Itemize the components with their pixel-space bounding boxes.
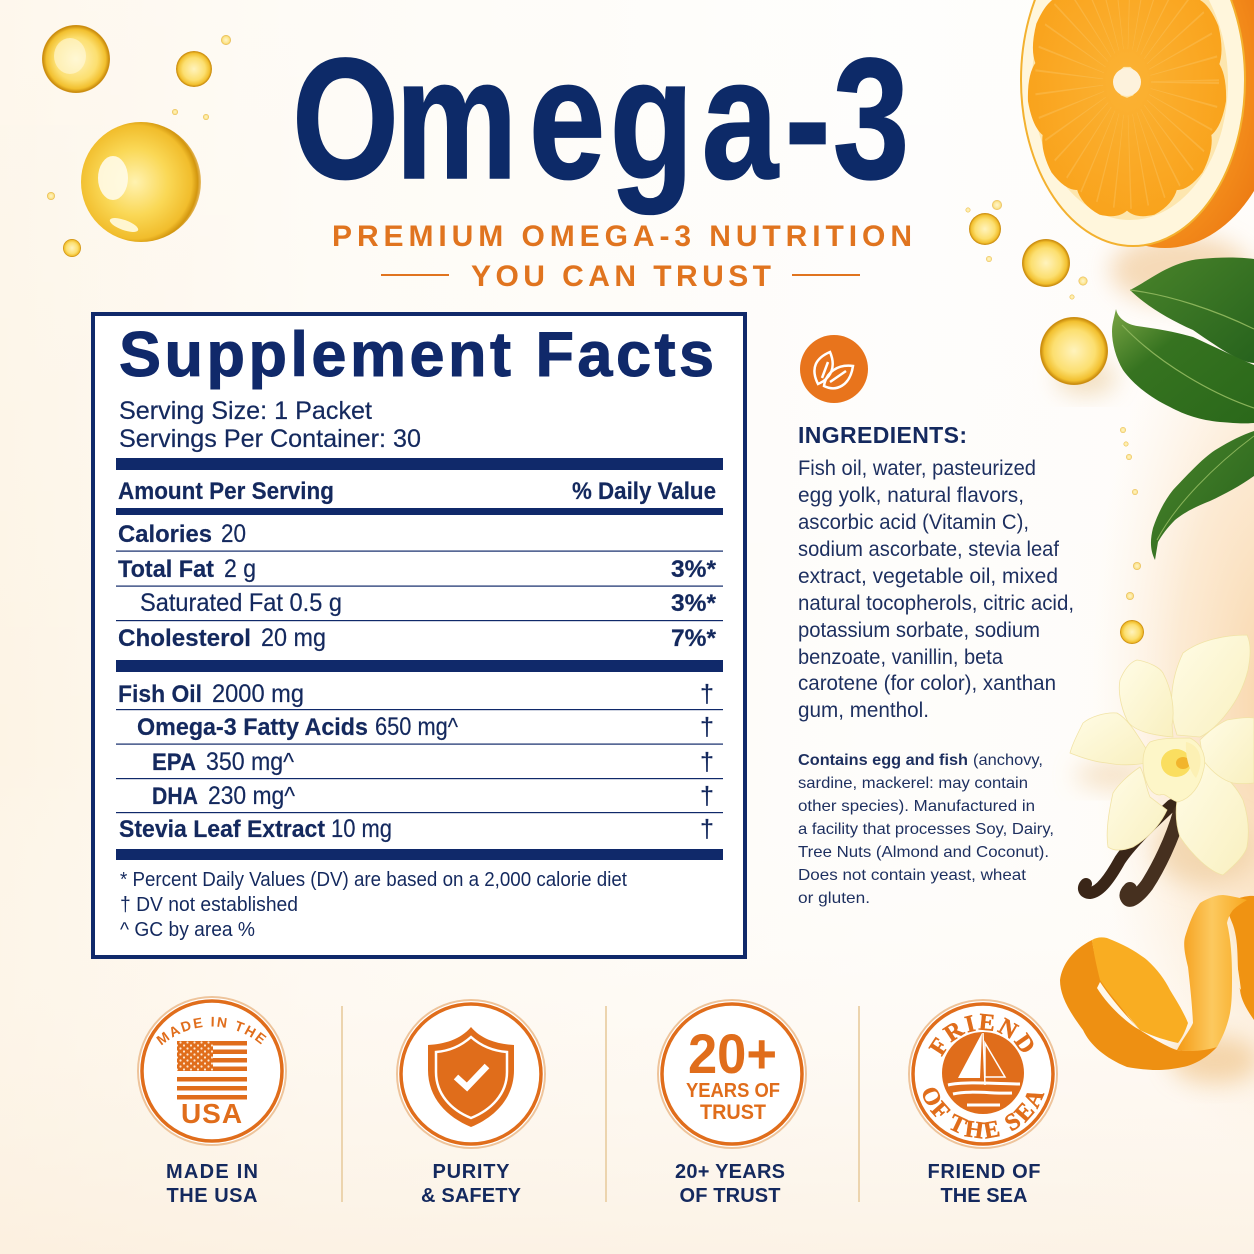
badge labels: THE USA [166, 1185, 258, 1207]
row: stevia [119, 815, 714, 843]
inner flesh band [1092, 937, 1188, 1043]
row: EPA: EPA [152, 749, 196, 776]
badge: purity and safety [397, 1000, 545, 1148]
heading: supplement facts: Supplement Facts [119, 320, 714, 390]
row: stevia: 10 mg [331, 815, 392, 843]
outer skin band [1060, 940, 1217, 1070]
badge: friend of the sea: FRIEND [928, 1014, 1034, 1057]
badge labels [166, 1161, 1040, 1207]
allergen statement: sardine, mackerel: may contain [798, 775, 1028, 792]
title: Omega-3 [292, 23, 909, 216]
footnotes: ^ GC by area % [120, 919, 255, 941]
dividers [341, 1006, 860, 1202]
icon: flag [177, 1041, 247, 1100]
row: saturated fat: Saturated Fat 0.5 g [140, 589, 342, 617]
row: calories: 20 [221, 520, 246, 548]
allergen statement: Contains egg and fish [798, 752, 968, 769]
row: saturated fat [140, 589, 716, 617]
oil droplets right [966, 200, 1144, 644]
ingredients: egg yolk, natural flavors, [798, 484, 1024, 507]
orange slice [1021, 0, 1254, 248]
ingredients: benzoate, vanillin, beta [798, 646, 1003, 669]
allergen statement: Tree Nuts (Almond and Coconut). [798, 844, 1049, 861]
ingredients: INGREDIENTS: [798, 422, 967, 448]
ingredients: Fish oil, water, pasteurized [798, 457, 1036, 480]
row: fish oil: Fish Oil [118, 681, 202, 708]
row: total fat: 3%* [671, 556, 716, 583]
icon: leaf [800, 335, 868, 403]
badge labels: & SAFETY [421, 1185, 522, 1207]
icon: shield [428, 1027, 514, 1127]
badge: made in the usa [137, 996, 287, 1146]
subtitle [332, 220, 912, 293]
badge: 20+ years of trust [658, 1000, 806, 1148]
icon: sailboat [948, 1033, 1020, 1105]
ingredients: extract, vegetable oil, mixed [798, 565, 1058, 588]
row: fish oil: † [700, 680, 714, 708]
row: omega-3 [137, 713, 714, 741]
curved text: MADE IN THE [156, 1016, 267, 1046]
footnotes: * Percent Daily Values (DV) are based on a 2,000 calorie diet [120, 869, 627, 891]
row: total fat: Total Fat [118, 556, 214, 583]
row: DHA [152, 782, 714, 810]
badge: 20+ years of trust: TRUST [700, 1101, 766, 1124]
row: saturated fat: 3%* [671, 590, 716, 617]
ingredients: potassium sorbate, sodium [798, 619, 1040, 642]
row: DHA: † [700, 782, 714, 810]
row: DHA: DHA [152, 783, 198, 810]
ingredients: sodium ascorbate, stevia leaf [798, 538, 1059, 561]
row: total fat: 2 g [224, 555, 256, 583]
badge: 20+ years of trust: YEARS OF [686, 1080, 780, 1102]
ingredients: natural tocopherols, citric acid, [798, 592, 1074, 615]
badge labels: 20+ YEARS [675, 1161, 785, 1183]
subtitle: PREMIUM OMEGA-3 NUTRITION [332, 220, 912, 253]
allergen statement: (anchovy, [973, 752, 1043, 769]
row: cholesterol [118, 624, 716, 652]
ingredients: gum, menthol. [798, 699, 929, 722]
allergen statement: a facility that processes Soy, Dairy, [798, 821, 1054, 838]
table header: Amount Per Serving [118, 478, 334, 505]
row: EPA: 350 mg^ [206, 748, 294, 776]
right strand [1225, 896, 1254, 1020]
row: EPA: † [700, 748, 714, 776]
row: EPA [152, 748, 714, 776]
row: stevia: † [700, 815, 714, 843]
row: omega-3: 650 mg^ [375, 713, 458, 741]
badge labels: MADE IN [166, 1161, 258, 1183]
vanilla beans [1084, 805, 1180, 900]
badge labels: PURITY [432, 1161, 510, 1183]
badge labels: OF TRUST [680, 1185, 780, 1207]
row: fish oil [118, 680, 714, 708]
rising strand [1177, 895, 1247, 1051]
row: cholesterol: 7%* [671, 625, 716, 652]
allergen statement: other species). Manufactured in [798, 798, 1035, 815]
allergen statement [798, 752, 1054, 907]
table header: % Daily Value [572, 478, 716, 505]
subtitle: YOU CAN TRUST [471, 260, 771, 293]
row: omega-3: Omega-3 Fatty Acids [137, 714, 368, 741]
vanilla flower [1070, 635, 1254, 900]
table dividers [116, 458, 723, 860]
badge labels: THE SEA [940, 1185, 1028, 1207]
serving info: Servings Per Container: 30 [119, 425, 421, 453]
badge: 20+ years of trust: 20+ [688, 1022, 777, 1085]
badge: friend of the sea: OF THE SEA [922, 1088, 1045, 1139]
green leaves [1112, 258, 1254, 560]
footnotes [120, 869, 627, 941]
row: stevia: Stevia Leaf Extract [119, 816, 325, 843]
serving info: Serving Size: 1 Packet [119, 397, 372, 425]
allergen statement: or gluten. [798, 890, 870, 907]
ingredients [798, 422, 1074, 722]
row: cholesterol: Cholesterol [118, 625, 251, 652]
panel: supplement facts [93, 314, 745, 957]
allergen statement: Does not contain yeast, wheat [798, 867, 1027, 884]
badge: friend of the sea [908, 999, 1058, 1149]
ingredients: ascorbic acid (Vitamin C), [798, 511, 1029, 534]
ingredients: carotene (for color), xanthan [798, 672, 1056, 695]
row: DHA: 230 mg^ [208, 782, 295, 810]
table header [118, 478, 716, 505]
footnotes: † DV not established [120, 894, 298, 916]
row: omega-3: † [700, 713, 714, 741]
badge: made in the usa: USA [181, 1098, 243, 1129]
row: cholesterol: 20 mg [261, 624, 326, 652]
row: total fat [118, 555, 716, 583]
serving info [119, 397, 421, 453]
row: calories: Calories [118, 521, 212, 548]
orange peel curl [1060, 895, 1254, 1084]
row: fish oil: 2000 mg [212, 680, 304, 708]
oil droplets left [42, 25, 231, 257]
badge labels: FRIEND OF [928, 1161, 1040, 1183]
